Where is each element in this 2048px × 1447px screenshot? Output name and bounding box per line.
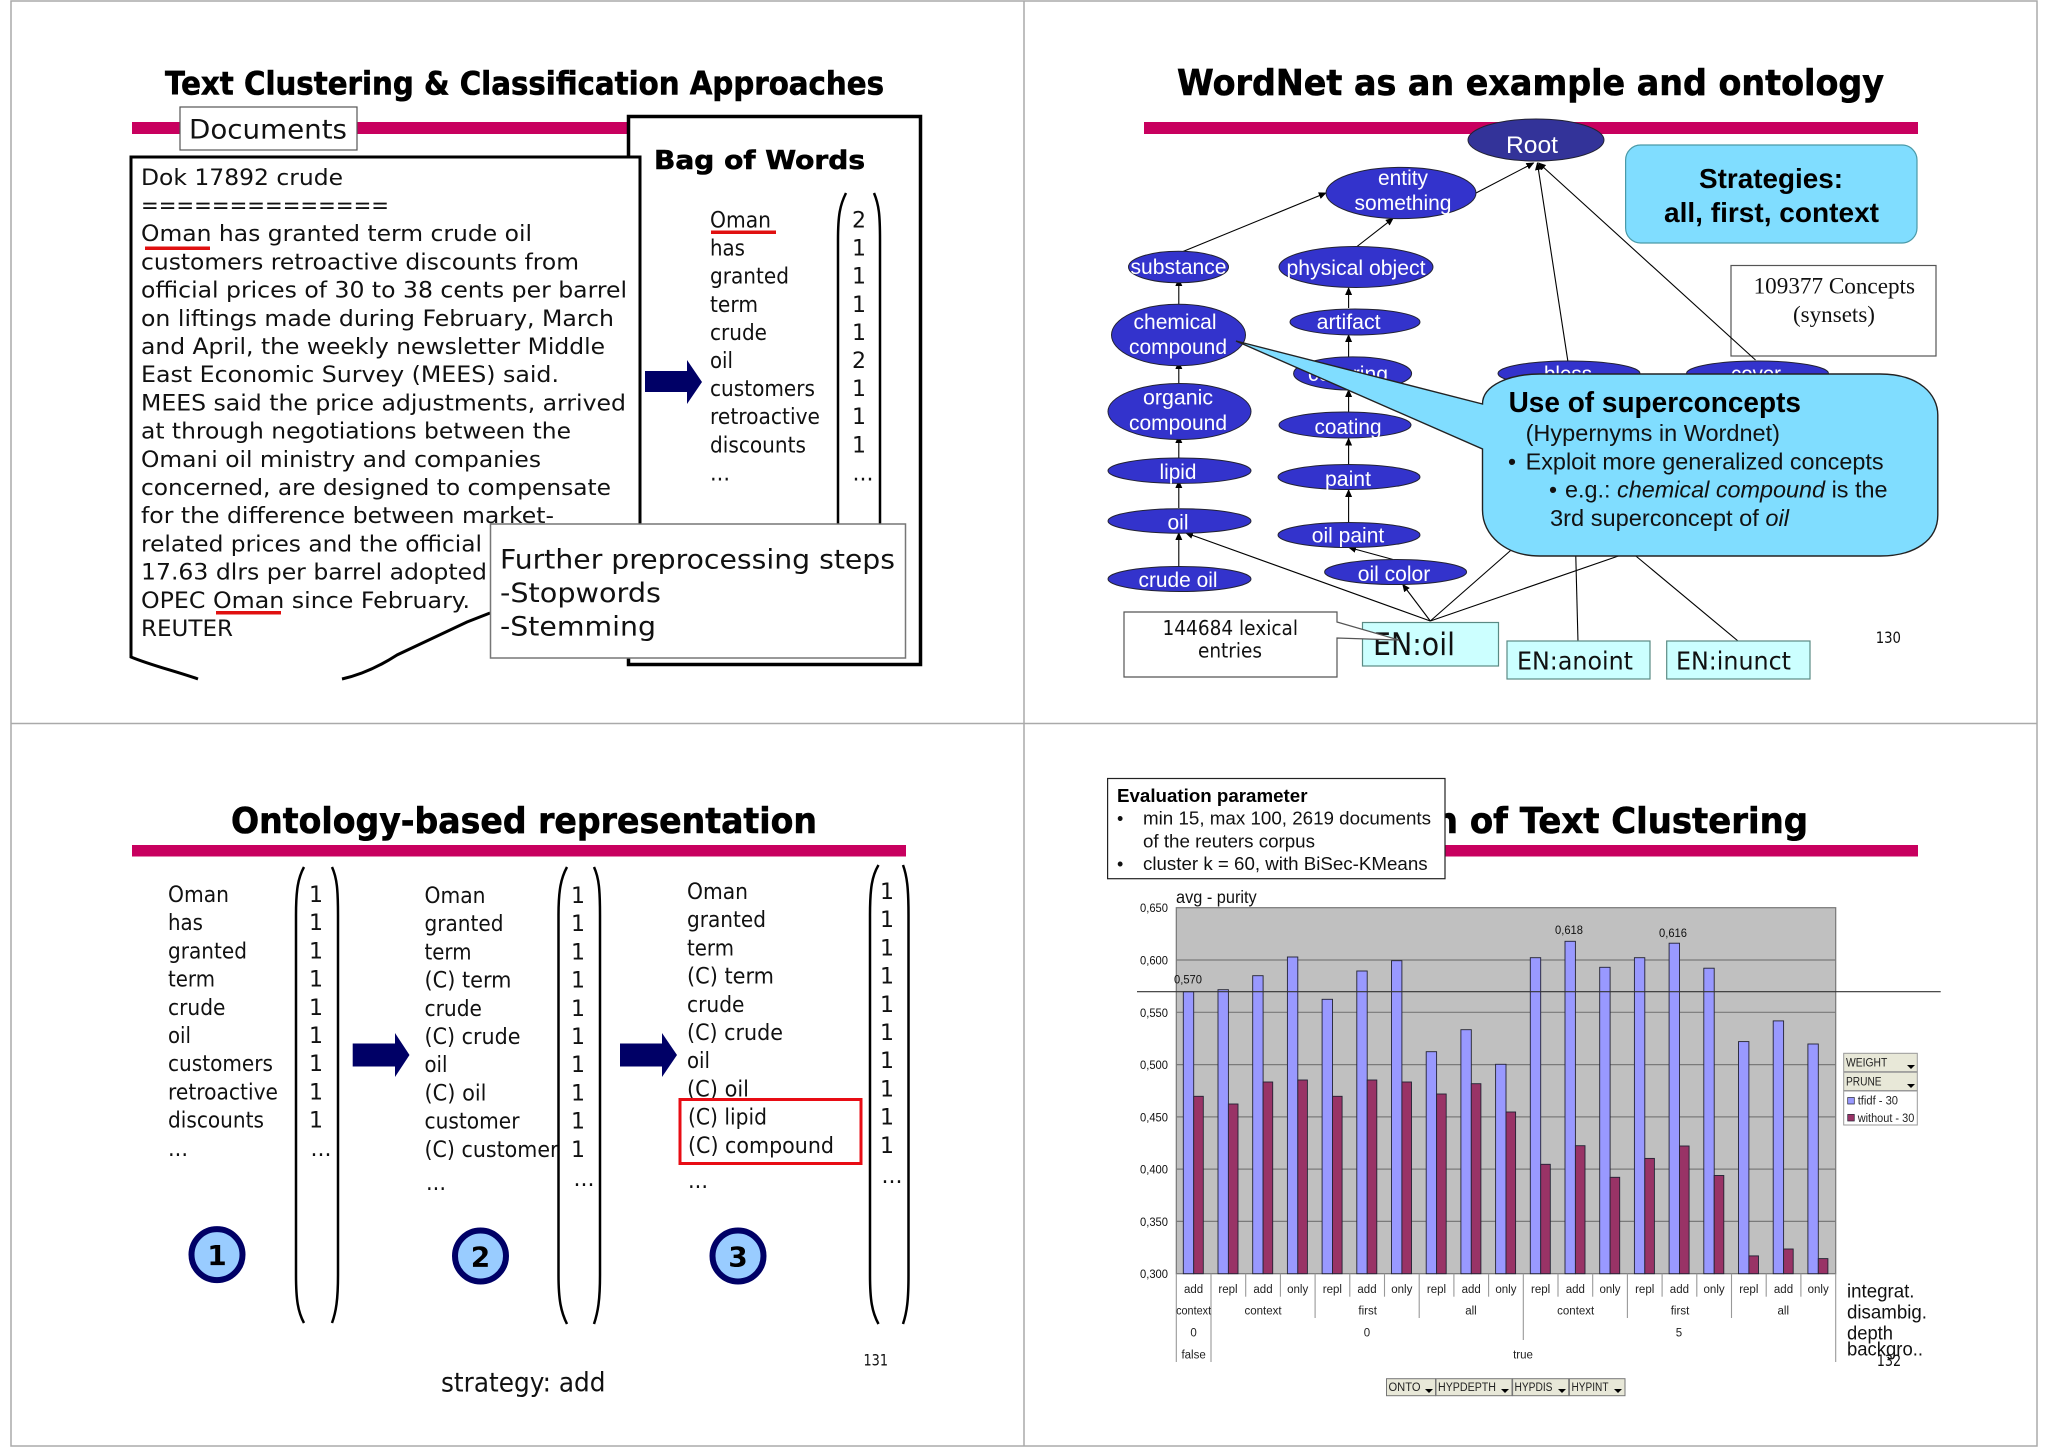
category labels: integration row: repl	[1531, 1284, 1550, 1296]
vector 1: 1	[309, 1080, 323, 1105]
vector 2: 1	[571, 1053, 585, 1078]
term list 3: (C) compound	[688, 1134, 834, 1159]
title: ontology-based representation: Ontology-based representation	[231, 801, 817, 842]
bag of words counts vector: 1	[852, 321, 866, 346]
document text: related prices and the official	[141, 532, 482, 557]
node: artifact	[1290, 309, 1420, 335]
term list 1: crude	[168, 996, 226, 1021]
vector 3: 1	[880, 993, 894, 1018]
brackets 2	[558, 867, 600, 1324]
node: coating	[1279, 412, 1411, 439]
callout: use of superconcepts: 3rd superconcept of oil	[1550, 505, 1790, 531]
panel: WordNet ontology	[1108, 63, 1938, 679]
filter buttons: HYPDIS	[1514, 1382, 1553, 1394]
vector 1: 1	[309, 996, 323, 1021]
category labels: disambiguation row: first	[1671, 1306, 1690, 1318]
category labels: integration row: only	[1599, 1284, 1621, 1296]
vector 1: 1	[309, 911, 323, 936]
node: oil color	[1325, 560, 1467, 586]
y axis labels	[1140, 901, 1168, 1281]
callout: further preprocessing steps: -Stopwords	[500, 578, 661, 609]
step badge 1	[192, 1229, 242, 1280]
legend: without - 30	[1857, 1113, 1914, 1125]
brackets 3	[870, 865, 908, 1324]
node: organic compound: compound	[1129, 412, 1227, 435]
bag of words term list: term	[710, 293, 758, 318]
panel: ontology-based representation	[132, 801, 908, 1398]
document text: Dok 17892 crude	[141, 166, 343, 191]
lexical entry: EN:anoint	[1507, 641, 1650, 679]
callout: further preprocessing steps	[490, 524, 906, 658]
term list 2: crude	[424, 997, 482, 1022]
document text: Omani oil ministry and companies	[141, 448, 541, 473]
node: substance: substance	[1130, 256, 1226, 279]
category labels: depth row	[1190, 1328, 1682, 1340]
category labels: integration row: add	[1462, 1284, 1481, 1296]
term list 1: customers	[168, 1052, 273, 1077]
document text: on liftings made during February, March	[141, 307, 614, 332]
bag of words counts vector: 2	[852, 208, 866, 234]
filter buttons	[1386, 1379, 1625, 1396]
note: evaluation parameter: •	[1117, 854, 1123, 874]
term list 1: Oman	[168, 883, 229, 908]
vector 3: 1	[880, 936, 894, 961]
filter buttons: ONTO	[1388, 1382, 1421, 1394]
vector 2: 1	[571, 1138, 585, 1163]
bag of words heading: Bag of Words	[654, 146, 865, 176]
documents label: Documents	[189, 114, 347, 146]
bag of words counts vector: 1	[852, 265, 866, 290]
term list 1	[168, 883, 278, 1162]
vector 1: 1	[309, 1052, 323, 1077]
node: oil paint: oil paint	[1312, 524, 1384, 548]
node: covering: covering	[1308, 363, 1388, 386]
vector 2: 1	[571, 884, 585, 909]
title rule	[1144, 122, 1918, 134]
vector 1: ...	[311, 1137, 331, 1162]
document text: 17.63 dlrs per barrel adopted	[141, 561, 487, 586]
data labels: 0,570	[1174, 972, 1202, 986]
term list 2: Oman	[424, 884, 486, 909]
callout: use of superconcepts: (Hypernyms in Wordnet)	[1526, 420, 1780, 446]
page number 132: 132	[1877, 1351, 1901, 1370]
node: chemical compound: compound	[1129, 336, 1227, 359]
node: crude oil: crude oil	[1138, 569, 1218, 592]
callout: use of superconcepts: •	[1549, 477, 1557, 503]
axis row names: disambig.	[1847, 1302, 1927, 1324]
term list 1: oil	[168, 1024, 191, 1049]
node: oil	[1108, 509, 1251, 534]
lexical entry: EN:inunct: EN:inunct	[1676, 646, 1791, 676]
data labels	[1174, 923, 1687, 986]
category labels: integration row: add	[1774, 1284, 1793, 1296]
term list 2	[424, 884, 559, 1196]
callout: further preprocessing steps: -Stemming	[500, 612, 656, 642]
category labels: background row: false	[1181, 1350, 1206, 1362]
lexical entry: EN:anoint: EN:anoint	[1517, 646, 1633, 676]
node: artifact: artifact	[1317, 311, 1381, 334]
callout: use of superconcepts: •	[1508, 448, 1516, 474]
step badge 2	[455, 1230, 506, 1282]
term list 2: customer	[424, 1110, 520, 1135]
caption: strategy add: strategy: add	[441, 1368, 606, 1398]
bar chart: avg purity	[1137, 887, 1941, 1396]
y axis labels: 0,300	[1140, 1267, 1168, 1281]
vector 3: 1	[880, 1077, 894, 1102]
node: paint	[1278, 464, 1420, 491]
callout: strategies: all, first, context	[1664, 197, 1879, 228]
term list 2: (C) oil	[424, 1081, 486, 1106]
vector 3: ...	[882, 1164, 902, 1189]
highlight box: added superconcepts	[680, 1100, 861, 1164]
vector 2: 1	[571, 912, 585, 937]
document text: Oman has granted term crude oil	[141, 222, 532, 247]
note: evaluation parameter: min 15, max 100, 2619 documents	[1143, 808, 1431, 828]
term list 1: retroactive	[168, 1080, 278, 1105]
document text: REUTER	[141, 617, 233, 642]
category labels: background row	[1181, 1350, 1533, 1362]
document sheet	[131, 157, 640, 679]
term list 2: (C) term	[424, 969, 512, 994]
bag of words term list: ...	[710, 461, 730, 486]
vector 1: 1	[309, 883, 323, 908]
term list 2: oil	[424, 1053, 448, 1078]
step badge 3	[712, 1230, 764, 1282]
callout: further preprocessing steps: Further preprocessing steps	[500, 544, 895, 576]
step badge 1: 1	[207, 1239, 227, 1272]
bag of words box	[628, 116, 920, 664]
bag of words term list: retroactive	[710, 405, 820, 430]
axis row names: depth	[1847, 1323, 1893, 1345]
term list 3: oil	[687, 1049, 710, 1074]
callout: lexical entries count	[1124, 612, 1399, 677]
bag of words counts vector: 1	[852, 433, 866, 458]
note: concept count: (synsets)	[1793, 302, 1875, 327]
callout: use of superconcepts	[1236, 341, 1938, 556]
vector 2	[571, 884, 594, 1192]
legend: WEIGHT	[1846, 1058, 1887, 1070]
vector 2: ...	[574, 1167, 594, 1192]
legend: tfidf - 30	[1858, 1096, 1898, 1108]
page number 130: 130	[1876, 628, 1901, 647]
node: oil paint	[1278, 522, 1420, 548]
category labels: disambiguation row: all	[1778, 1306, 1789, 1318]
document text: customers retroactive discounts from	[141, 250, 579, 275]
category labels: integration row: only	[1704, 1284, 1725, 1296]
category labels: integration row: repl	[1427, 1284, 1446, 1296]
title rule	[1144, 845, 1918, 856]
node: lipid	[1108, 458, 1251, 484]
title rule	[132, 122, 627, 134]
term list 3: Oman	[687, 880, 748, 905]
term list 1: term	[168, 968, 215, 993]
term list 3: crude	[687, 993, 744, 1018]
arrow 2 to 3	[620, 1033, 677, 1077]
vector 2: 1	[571, 1025, 585, 1050]
bag of words counts vector: 2	[852, 349, 866, 374]
callout: use of superconcepts: e.g.: chemical compound is the	[1565, 477, 1888, 503]
axis row names: integrat.	[1847, 1280, 1914, 1302]
vector 3: 1	[880, 1049, 894, 1074]
node: organic compound: organic	[1143, 386, 1213, 410]
filter buttons: HYPDEPTH	[1438, 1382, 1496, 1394]
document text: for the difference between market-	[141, 504, 554, 529]
callout: lexical entries count: entries	[1198, 638, 1262, 662]
filter buttons: HYPINT	[1572, 1382, 1608, 1394]
underline: Oman in last line	[216, 611, 281, 614]
document text: MEES said the price adjustments, arrived	[141, 391, 626, 416]
category labels: integration row: add	[1253, 1284, 1273, 1296]
bars: without series	[1194, 1080, 1828, 1274]
category labels: depth row: 0	[1190, 1328, 1197, 1340]
category labels: integration row: repl	[1218, 1284, 1238, 1296]
vector 2: 1	[571, 997, 585, 1022]
node: paint: paint	[1325, 468, 1371, 491]
node: entity something	[1326, 167, 1476, 219]
axis row names: backgro..	[1847, 1338, 1923, 1360]
y axis labels: 0,650	[1140, 901, 1168, 915]
note: evaluation parameter: of the reuters corpus	[1143, 832, 1315, 852]
category labels: background row: true	[1513, 1350, 1533, 1362]
lexical entry: EN:oil	[1362, 622, 1498, 666]
step badge 3: 3	[728, 1240, 748, 1274]
vector brackets	[838, 193, 880, 530]
category labels: depth row: 0	[1364, 1328, 1370, 1340]
category labels: integration row: add	[1357, 1284, 1377, 1296]
category labels: integration row: only	[1287, 1284, 1308, 1296]
term list 3: ...	[688, 1169, 708, 1194]
bag of words term list: customers	[710, 377, 815, 402]
bag of words term list: has	[710, 237, 745, 262]
term list 2: (C) customer	[424, 1138, 559, 1163]
node: oil color: oil color	[1358, 563, 1430, 586]
category labels: integration row: repl	[1635, 1284, 1654, 1296]
vector 1: 1	[309, 1024, 323, 1049]
plot area	[1176, 908, 1836, 1274]
lexical entry: EN:inunct	[1667, 641, 1810, 679]
category labels: integration row: add	[1670, 1284, 1689, 1296]
arrow 1 to 2	[353, 1033, 410, 1077]
bag of words term list: discounts	[710, 433, 806, 458]
title: text clustering: Text Clustering & Classification Approaches	[165, 64, 884, 102]
bag of words counts vector	[852, 208, 873, 486]
callout: strategies	[1626, 145, 1917, 243]
y axis labels: 0,450	[1140, 1110, 1168, 1124]
node: physical object: physical object	[1286, 257, 1426, 280]
node: crude oil	[1108, 566, 1251, 592]
bars: tfidf series	[1183, 941, 1818, 1274]
document text: OPEC Oman since February.	[141, 589, 470, 614]
note: evaluation parameter: Evaluation parameter	[1117, 786, 1308, 806]
y axis labels: 0,600	[1140, 954, 1168, 968]
underline: Oman in list	[711, 230, 776, 234]
term list 3: term	[687, 936, 734, 961]
term list 3: (C) crude	[687, 1021, 783, 1046]
panel: text clustering and classification approaches	[131, 64, 920, 679]
node: coating: coating	[1314, 416, 1382, 439]
bag of words term list: crude	[710, 321, 767, 346]
vector 3: 1	[880, 1106, 894, 1131]
reference line at 0,570	[1137, 991, 1941, 993]
node: lipid: lipid	[1160, 461, 1196, 484]
y axis labels: 0,400	[1140, 1163, 1168, 1177]
vector 3: 1	[880, 965, 894, 990]
term list 1: discounts	[168, 1109, 264, 1134]
category labels: integration row: repl	[1323, 1284, 1342, 1296]
bag of words counts vector: ...	[853, 461, 873, 486]
category labels: integration row: repl	[1739, 1284, 1758, 1296]
term list 2: granted	[424, 912, 504, 937]
node: organic compound	[1108, 384, 1251, 440]
bag of words counts vector: 1	[852, 405, 866, 430]
term list 2: ...	[426, 1171, 446, 1196]
category labels: integration row: add	[1566, 1284, 1585, 1296]
brackets 1	[296, 867, 338, 1323]
category labels: integration row	[1184, 1284, 1829, 1296]
document text: ==============	[141, 194, 389, 219]
bag of words term list: oil	[710, 349, 733, 374]
title rule	[132, 845, 906, 856]
callout: use of superconcepts: Exploit more generalized concepts	[1526, 448, 1884, 474]
document text: and April, the weekly newsletter Middle	[141, 335, 605, 360]
term list 2: term	[424, 940, 472, 965]
y axis labels: 0,550	[1140, 1006, 1168, 1020]
term list 3: (C) oil	[687, 1077, 749, 1102]
callout: use of superconcepts: Use of superconcepts	[1509, 387, 1801, 419]
underline: Oman in first line	[145, 246, 210, 250]
callout: strategies: Strategies:	[1699, 163, 1843, 194]
vector 3	[880, 880, 902, 1189]
y axis labels: 0,500	[1140, 1058, 1168, 1072]
concept nodes	[1108, 119, 1828, 592]
term list 3: (C) term	[687, 965, 774, 990]
vector 3: 1	[880, 1021, 894, 1046]
document text: East Economic Survey (MEES) said.	[141, 363, 559, 388]
node: entity something: something	[1354, 192, 1452, 215]
category labels: disambiguation row: context	[1244, 1306, 1282, 1318]
category labels: depth row: 5	[1676, 1328, 1682, 1340]
vector 1	[309, 883, 331, 1162]
node: root	[1468, 119, 1604, 161]
vector 1: 1	[309, 968, 323, 993]
vector 1: 1	[309, 1109, 323, 1134]
bag of words term list	[710, 208, 820, 486]
note: evaluation parameter: •	[1117, 808, 1123, 828]
vector 2: 1	[571, 969, 585, 994]
document text	[141, 166, 627, 642]
legend: PRUNE	[1846, 1077, 1882, 1089]
legend	[1844, 1053, 1917, 1125]
bag of words counts vector: 1	[852, 377, 866, 402]
title: evaluation of text clustering: Evaluation of Text Clustering	[1256, 801, 1808, 842]
bag of words term list: Oman	[710, 208, 771, 234]
category labels: disambiguation row: all	[1465, 1306, 1477, 1318]
term list 3: granted	[687, 908, 766, 933]
arrow: documents to bag of words	[645, 360, 702, 404]
category labels: integration row: add	[1184, 1284, 1203, 1296]
term list 2: (C) crude	[424, 1025, 520, 1050]
node: covering	[1294, 357, 1412, 390]
vector 2: 1	[571, 940, 585, 965]
y axis labels: 0,350	[1140, 1215, 1168, 1229]
panel: evaluation of text clustering	[1108, 778, 1941, 1396]
axis row names	[1847, 1280, 1927, 1360]
category labels: disambiguation row: context	[1557, 1306, 1595, 1318]
vector 2: 1	[571, 1110, 585, 1135]
vector 3: 1	[880, 1134, 894, 1159]
term list 3: (C) lipid	[688, 1106, 767, 1131]
node: chemical compound: chemical	[1134, 311, 1216, 334]
node: bless: bless	[1544, 363, 1592, 386]
bag of words counts vector: 1	[852, 237, 866, 262]
category labels: disambiguation row: first	[1358, 1306, 1378, 1318]
bag of words term list: granted	[710, 265, 789, 290]
step badge 2: 2	[471, 1240, 490, 1274]
data labels: 0,618	[1555, 923, 1583, 937]
node: physical object	[1279, 246, 1433, 288]
callout: lexical entries count: 144684 lexical	[1162, 616, 1298, 640]
documents label	[180, 107, 357, 150]
data labels: 0,616	[1659, 926, 1687, 940]
vector 3: 1	[880, 908, 894, 933]
node: entity something: entity	[1378, 167, 1428, 190]
hierarchy arrows	[1179, 163, 1756, 642]
node: cover: cover	[1731, 363, 1781, 386]
node: chemical compound	[1112, 304, 1246, 366]
vector 1: 1	[309, 939, 323, 964]
page number 131: 131	[864, 1351, 888, 1370]
note: evaluation parameter: cluster k = 60, with BiSec-KMeans	[1143, 854, 1428, 874]
category labels: disambiguation row	[1176, 1306, 1789, 1318]
title: WordNet: WordNet as an example and ontology	[1177, 63, 1884, 104]
category labels: integration row: only	[1391, 1284, 1413, 1296]
term list 3	[687, 880, 834, 1194]
node: bless	[1498, 361, 1640, 386]
category axis ticks	[1176, 1274, 1836, 1362]
vector 3: 1	[880, 880, 894, 905]
bag of words counts vector: 1	[852, 293, 866, 318]
document text: at through negotiations between the	[141, 420, 571, 445]
category labels: integration row: only	[1808, 1284, 1829, 1296]
lexical entry: EN:oil: EN:oil	[1373, 627, 1455, 663]
node: oil: oil	[1168, 512, 1188, 534]
node: cover	[1686, 361, 1828, 386]
note: concept count: 109377 Concepts	[1754, 274, 1915, 299]
note: evaluation parameter	[1108, 778, 1445, 879]
chart axis title: avg - purity	[1176, 887, 1257, 907]
vector 2: 1	[571, 1081, 585, 1106]
node: root: Root	[1506, 132, 1558, 159]
document text: official prices of 30 to 38 cents per barrel	[141, 279, 627, 304]
note: concept count	[1731, 266, 1936, 356]
category labels: disambiguation row: context	[1176, 1306, 1212, 1318]
category labels: integration row: only	[1495, 1284, 1517, 1296]
document text: concerned, are designed to compensate	[141, 476, 611, 501]
term list 1: granted	[168, 939, 247, 964]
term list 1: ...	[168, 1137, 188, 1162]
term list 1: has	[168, 911, 203, 936]
